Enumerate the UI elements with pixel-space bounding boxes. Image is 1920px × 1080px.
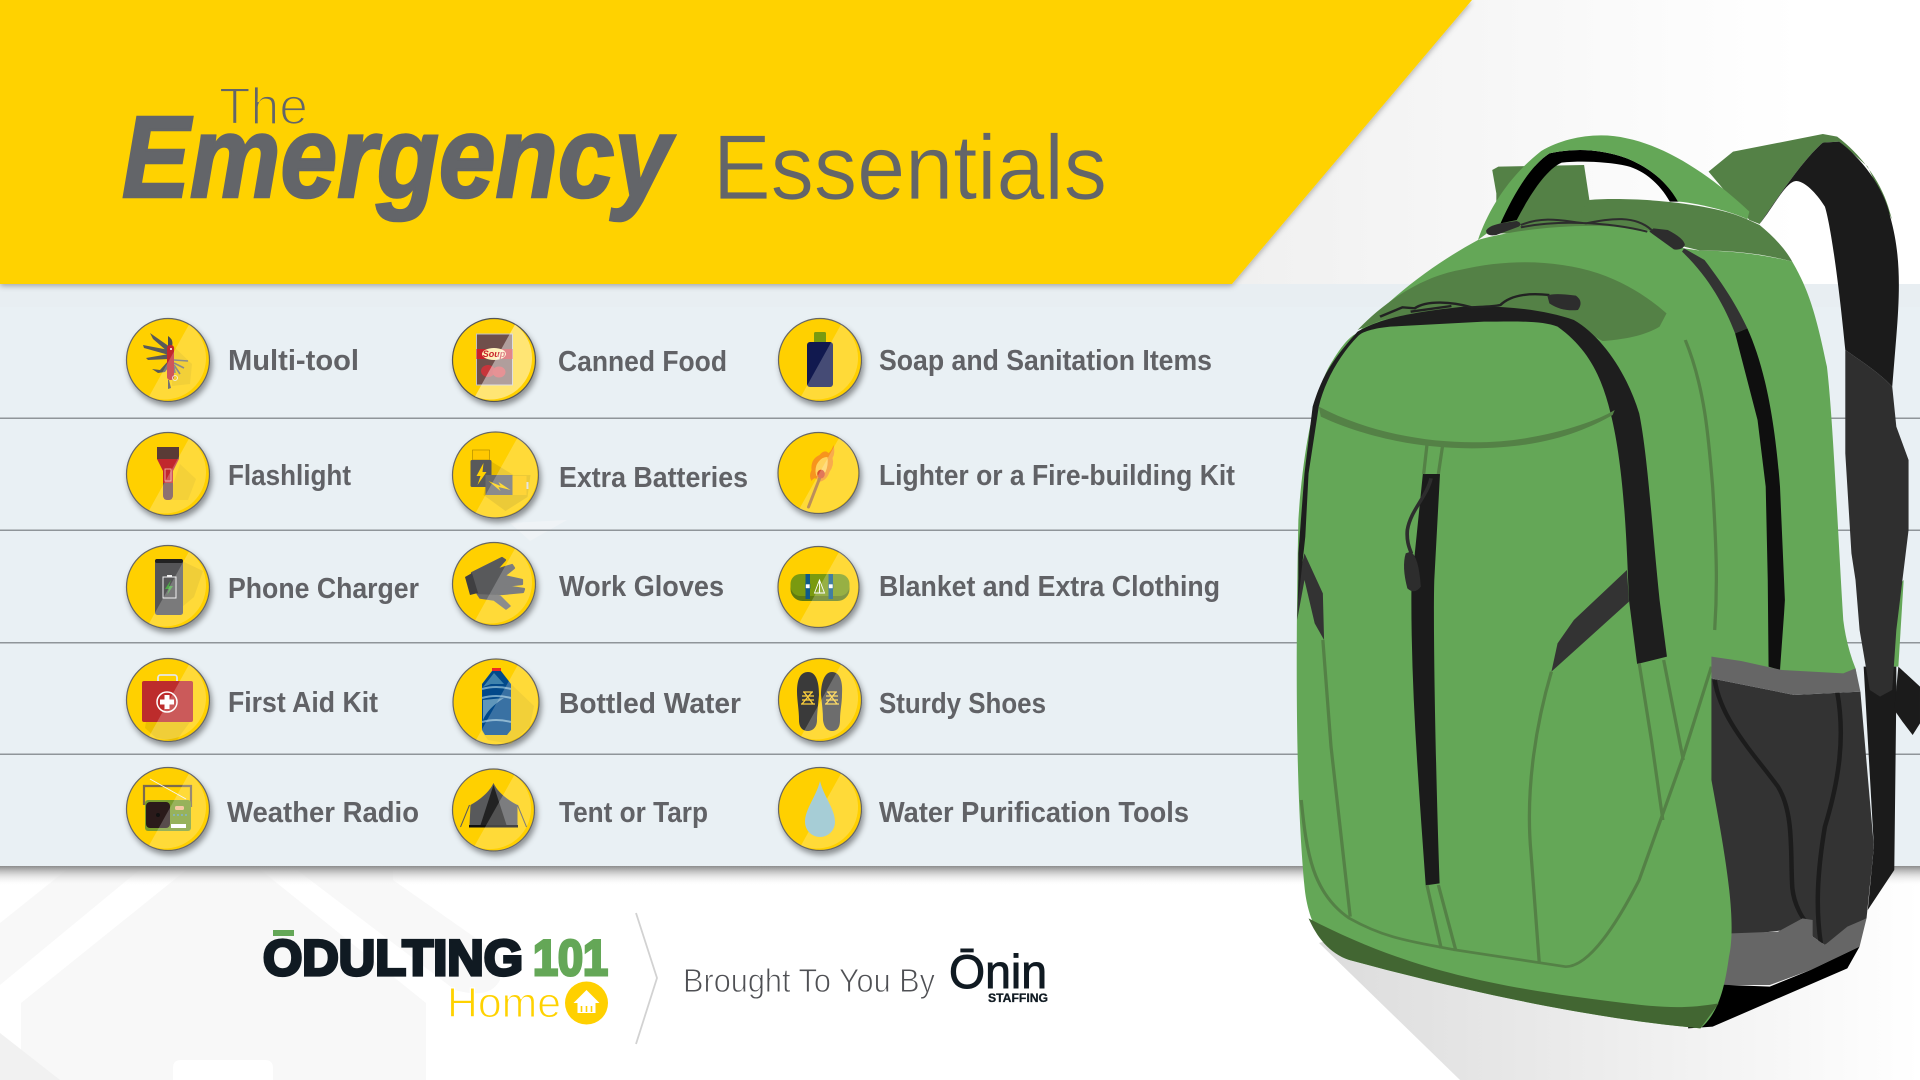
panel top band [0, 284, 1920, 307]
icon: multi-tool [126, 318, 210, 402]
item: Water Purification Tools [778, 768, 1189, 850]
label: Canned Food [558, 346, 727, 378]
icon: soup can: Soup [483, 349, 506, 359]
panel: checklist [0, 284, 1920, 886]
background: faint hexagon pattern [0, 867, 500, 1080]
backpack: pocket rim [1711, 657, 1860, 695]
label: Soap and Sanitation Items [879, 345, 1212, 377]
backpack: flap seam [1319, 407, 1615, 448]
item: Tent or Tarp [452, 769, 708, 851]
backpack: collar [1566, 199, 1792, 262]
icon: gloves [452, 542, 536, 626]
yellow title banner [0, 0, 1472, 284]
item: Flashlight [126, 432, 351, 516]
label: Work Gloves [559, 571, 724, 603]
label: Extra Batteries [559, 462, 748, 494]
logo number: 101: 101 [533, 930, 608, 986]
label: Flashlight [228, 460, 351, 492]
pocket base [1688, 918, 1867, 985]
label: Blanket and Extra Clothing [879, 571, 1220, 603]
item: Soap and Sanitation Items [778, 318, 1212, 402]
label: First Aid Kit [228, 687, 378, 719]
backpack: shoulder strap upper [1760, 142, 1899, 387]
label: Weather Radio [227, 797, 419, 829]
backpack: handle back [1492, 165, 1589, 233]
backpack: bottom band [1309, 918, 1719, 1028]
item: First Aid Kit [126, 658, 378, 742]
label: Bottled Water [559, 688, 741, 720]
backpack long shadow [1319, 860, 1920, 1080]
backpack base [1688, 947, 1860, 1028]
icon: radio [126, 768, 210, 850]
label: Lighter or a Fire-building Kit [879, 460, 1235, 492]
backpack: side pocket lower [1688, 667, 1874, 1028]
backpack [1297, 134, 1920, 1028]
item: Bottled Water [453, 659, 741, 745]
icon: rolled blanket [778, 546, 859, 628]
backpack: main body [1297, 226, 1858, 1028]
logo word: Home: Home [447, 979, 561, 1026]
pocket folds [1715, 680, 1841, 943]
item: Canned Food [452, 318, 727, 402]
item: Blanket and Extra Clothing [778, 546, 1220, 628]
icon: tent [452, 769, 534, 851]
logo macron [273, 930, 294, 936]
backpack: side panel [1864, 667, 1896, 910]
panel shadow [0, 866, 1920, 886]
label: Water Purification Tools [879, 797, 1189, 829]
logo word: Odulting: ODULTING [263, 930, 523, 986]
backpack: right zipper upper [1682, 248, 1747, 333]
backpack: front zipper band [1298, 306, 1667, 664]
icon: soap bottle [778, 318, 862, 402]
backpack: shoulder strap lower [1845, 350, 1909, 697]
icon: soup can [452, 318, 536, 402]
backpack: strap edge [1709, 134, 1892, 224]
item: Work Gloves [452, 542, 724, 626]
backpack: handle [1478, 135, 1749, 240]
backpack: green sliver behind strap [1892, 580, 1904, 667]
logo word: Staffing: STAFFING [988, 991, 1048, 1005]
item: Lighter or a Fire-building Kit [778, 432, 1235, 514]
item: Sturdy Shoes [778, 658, 1046, 742]
backpack: wedge [1551, 570, 1629, 672]
backpack: zipper pulls and cords [1380, 219, 1685, 591]
backpack: top pocket shadow [1358, 262, 1667, 341]
backpack: seams [1301, 340, 1716, 967]
label: Sturdy Shoes [879, 688, 1046, 720]
title word: Essentials: Essentials [713, 117, 1107, 219]
icon: first aid kit [126, 658, 210, 742]
icon: water bottle [453, 659, 539, 745]
sponsor text: Brought To You By [683, 962, 935, 999]
title word: The: The [219, 78, 308, 136]
background: grey wedge behind banner [1200, 0, 1800, 290]
item: Extra Batteries [452, 432, 748, 518]
label: Tent or Tarp [559, 797, 708, 829]
item: Weather Radio [126, 768, 419, 850]
icon: water drop [778, 768, 862, 850]
label: Phone Charger [228, 573, 419, 605]
icon: home badge [565, 982, 608, 1024]
item: Multi-tool [126, 318, 359, 402]
backpack: left side panel [1297, 553, 1324, 640]
backpack: handle inner [1500, 150, 1679, 223]
logo: Onin Staffing [949, 945, 1048, 1005]
logo: Odulting 101 Home [263, 930, 608, 1026]
panel background [0, 284, 1920, 866]
chevron divider [636, 913, 657, 1044]
backpack: right zipper lower [1735, 328, 1785, 670]
icon: burning match [778, 432, 859, 514]
icon: flashlight [126, 432, 210, 516]
icon: shoes [778, 658, 862, 742]
backpack: center zipper [1411, 474, 1440, 885]
label: Multi-tool [228, 345, 359, 377]
pocket mesh [1688, 667, 1874, 945]
title word: Emergency: Emergency [122, 92, 676, 222]
logo word: Onin: Ōnin [949, 945, 1047, 998]
item: Phone Charger [126, 546, 419, 628]
icon: batteries [452, 432, 538, 518]
backpack: strap clip [1894, 667, 1920, 735]
title [122, 78, 1107, 222]
icon: phone [126, 546, 210, 628]
